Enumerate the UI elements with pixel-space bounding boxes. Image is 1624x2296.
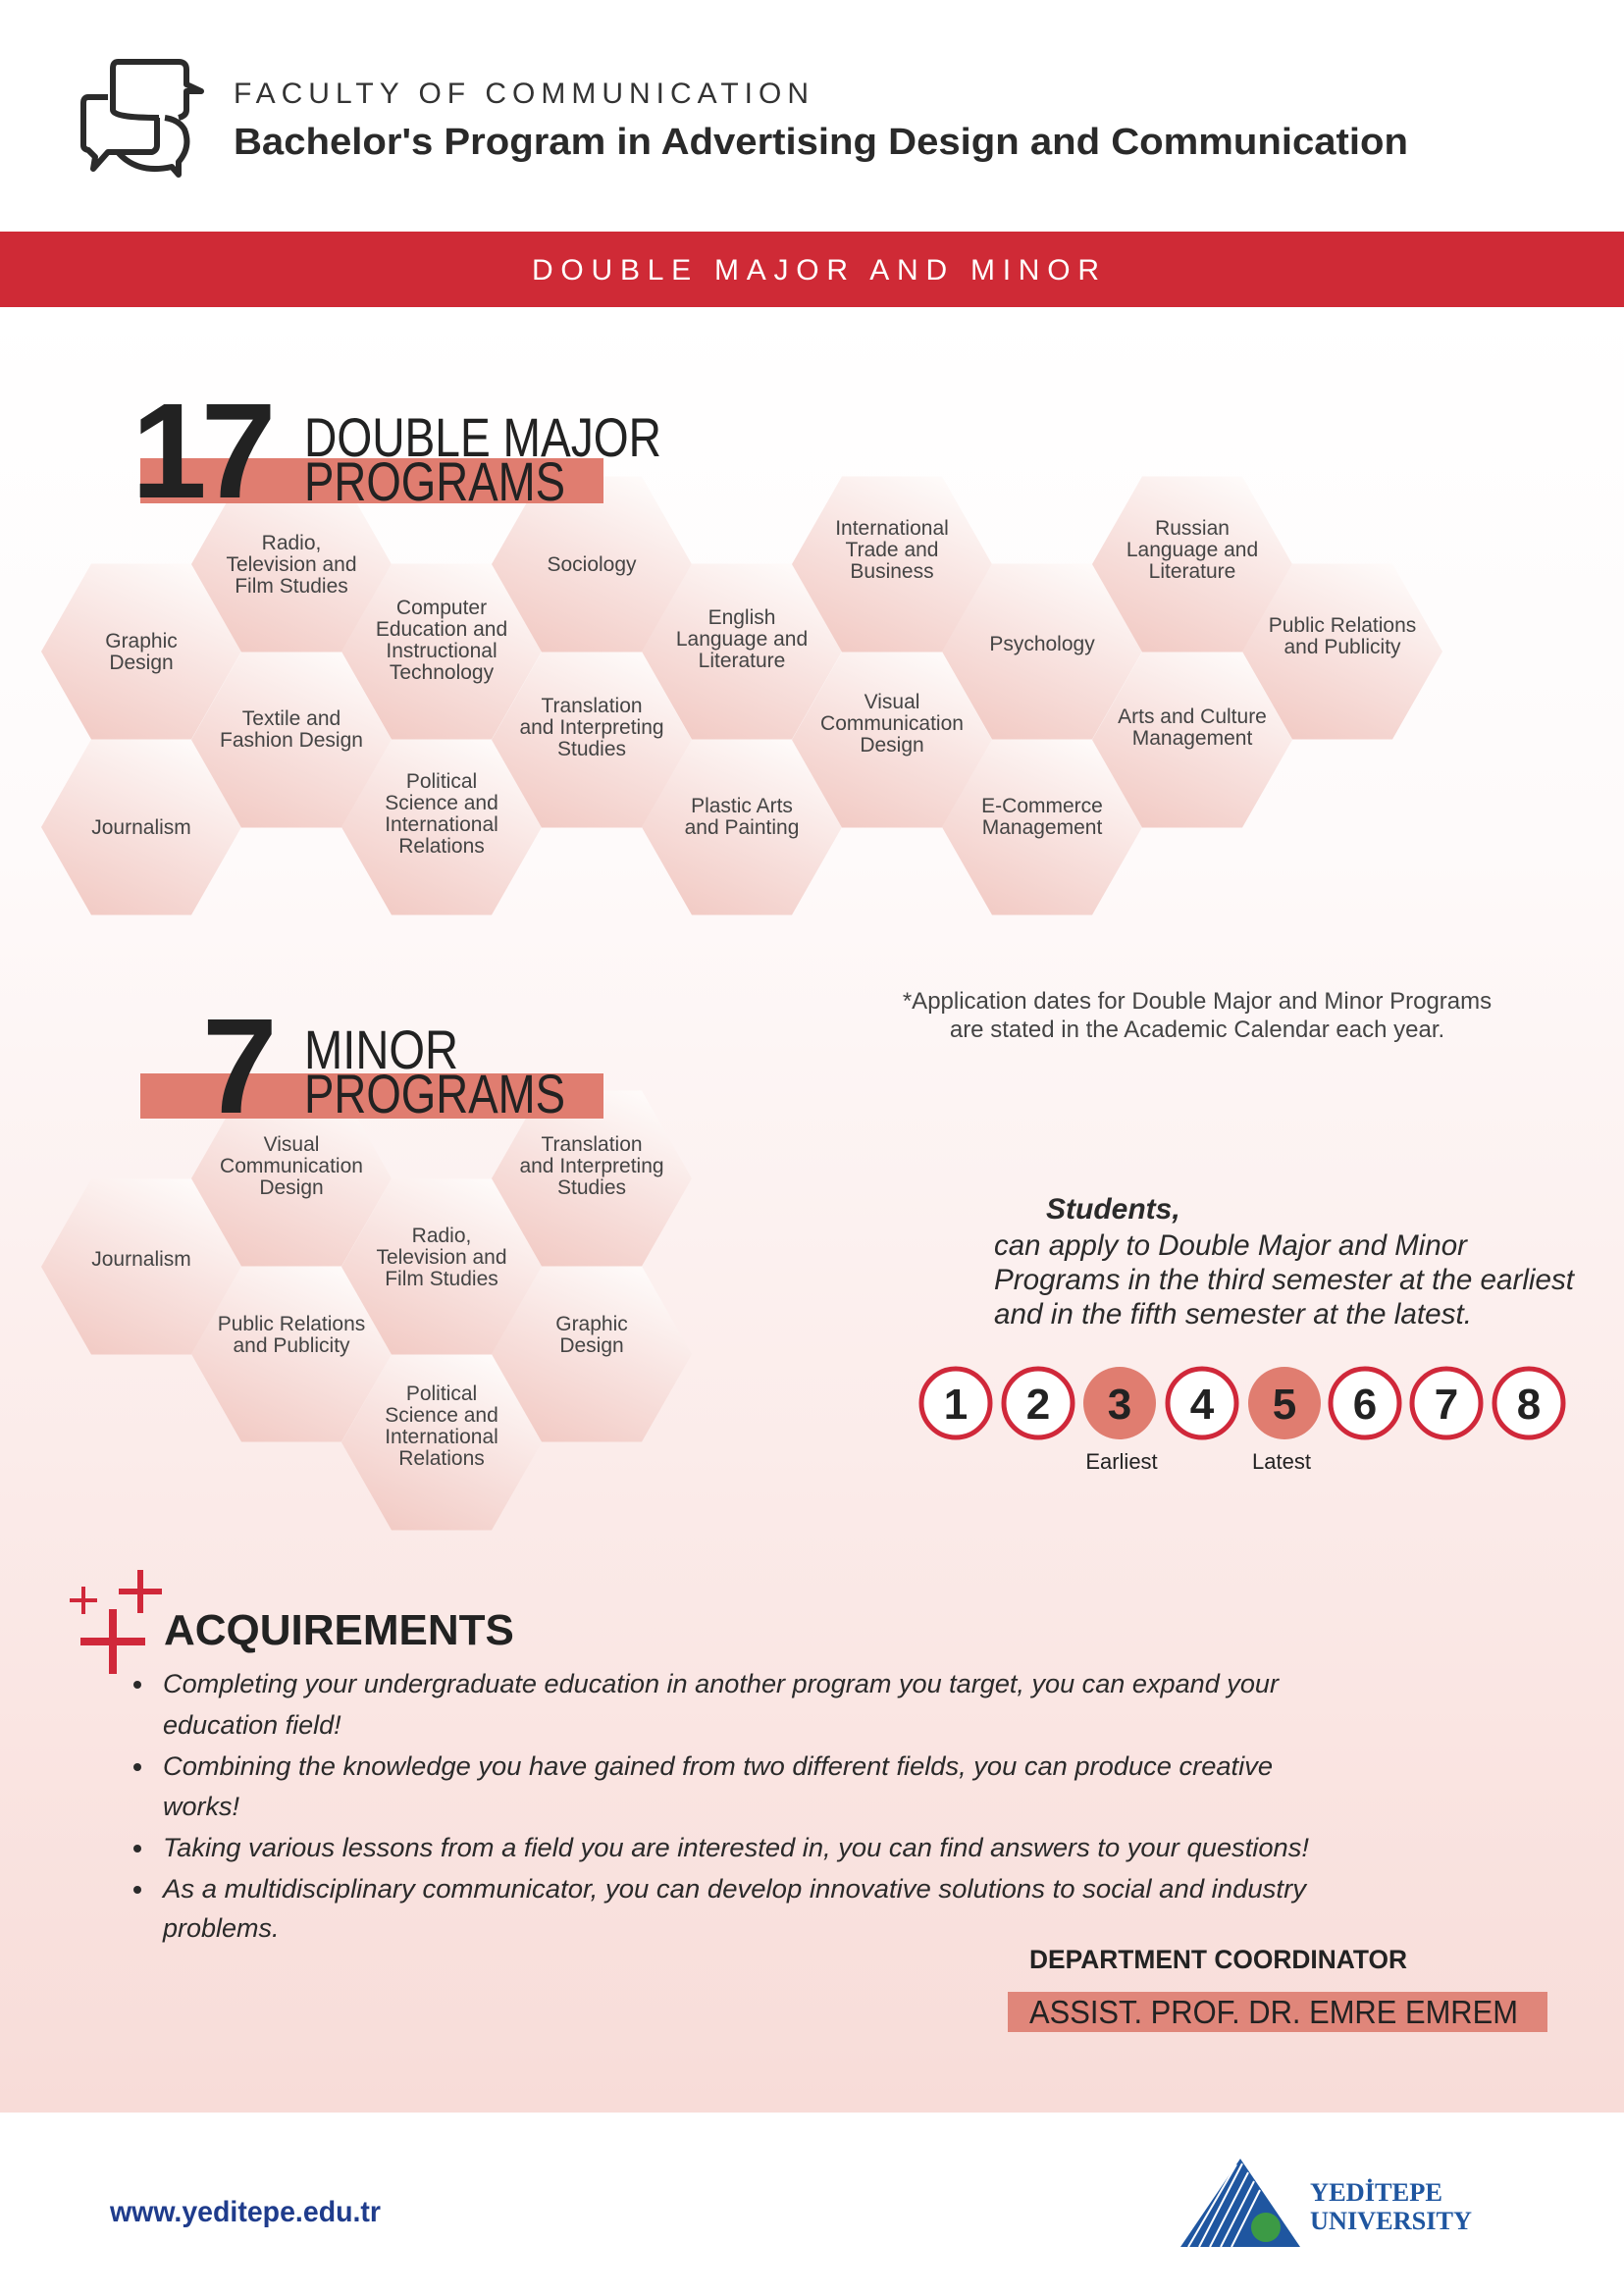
note: application dates [903,988,1492,1043]
hexagon grid: minor programs: and Interpreting [519,1155,664,1177]
header titles: Bachelor's Program in Advertising Design and Communication [234,122,1408,163]
hexagon grid: double major programs [41,477,1442,914]
hexagon grid: double major programs: Film Studies [235,575,348,598]
semester circles: 4 [1190,1381,1215,1429]
heading: 17 double major programs [131,376,661,527]
hexagon grid: double major programs: International [385,813,498,836]
hexagon grid: minor programs: Journalism [91,1248,191,1271]
hexagon grid: double major programs: Psychology [989,633,1095,655]
hexagon grid: minor programs: Relations [398,1447,485,1470]
students text block: and in the fifth semester at the latest. [994,1298,1472,1331]
hexagon grid: double major programs: Computer [396,597,487,619]
hexagon grid: minor programs: Science and [385,1404,498,1427]
students text block: Programs in the third semester at the earliest [994,1264,1576,1296]
bullet list: Taking various lessons from a field you are interested in, you can find answers to your questions! [163,1833,1309,1862]
hexagon grid: double major programs: E-Commerce [981,795,1103,817]
hexagon grid: double major programs: Design [860,734,924,757]
hexagon grid: double major programs: Language and [676,628,808,651]
hexagon grid: double major programs: Visual [864,691,919,713]
hexagon grid: double major programs: Sociology [547,553,637,576]
hexagon grid: double major programs: Studies [557,738,626,760]
semester circles: 6 [1353,1381,1377,1429]
hexagon grid: minor programs: Visual [264,1133,319,1156]
semester circles: 1 [944,1381,968,1429]
bullet list: As a multidisciplinary communicator, you can develop innovative solutions to social and industry [161,1874,1308,1904]
hexagon grid: double major programs: Instructional [386,640,498,662]
hexagon grid: double major programs: English [708,606,775,629]
hexagon grid: double major programs: Graphic [105,630,178,652]
hexagon grid: double major programs: Management [1132,727,1252,750]
hexagon grid: double major programs: International [835,517,949,540]
hexagon grid: minor programs: Television and [376,1246,507,1269]
semester circles: Earliest [1085,1449,1158,1474]
bullet list [133,1669,1309,1943]
heading: 17 double major programs: PROGRAMS [304,450,565,512]
logo: yeditepe university: UNIVERSITY [1310,2207,1472,2235]
hexagon grid: double major programs: and Publicity [1283,636,1401,658]
hexagon grid: minor programs: Translation [541,1133,643,1156]
hexagon grid: minor programs: Public Relations [218,1313,365,1335]
heading: acquirements: ACQUIREMENTS [164,1606,514,1654]
hexagon grid: double major programs: Television and [226,553,357,576]
header titles [234,78,1408,163]
icon: plus signs [70,1570,162,1674]
note: application dates: are stated in the Academic Calendar each year. [950,1017,1444,1043]
hexagon grid: double major programs: Political [406,770,477,793]
semester circles: 5 [1273,1381,1296,1429]
hexagon grid: double major programs: and Interpreting [519,716,664,739]
footer url: www.yeditepe.edu.tr [109,2196,381,2228]
hexagon grid: double major programs: Relations [398,835,485,858]
bullet list: education field! [163,1710,341,1740]
hexagon grid: minor programs: Film Studies [385,1268,498,1290]
students text block: Students, [1046,1193,1180,1226]
semester circles [921,1367,1563,1474]
hexagon grid: double major programs: Textile and [242,707,341,730]
hexagon grid: double major programs: Trade and [846,539,938,561]
hexagon grid: double major programs: Business [850,560,934,583]
hexagon grid: double major programs: Design [109,652,174,674]
hexagon grid: double major programs: Translation [541,695,643,717]
logo: yeditepe university [1180,2159,1472,2247]
hexagon grid: double major programs: Plastic Arts [691,795,793,817]
hexagon grid: minor programs [41,1091,692,1531]
heading: 17 double major programs: DOUBLE MAJOR [304,406,661,468]
hexagon grid: minor programs: Design [259,1176,324,1199]
department coordinator [1008,1945,1547,2032]
hexagon grid: double major programs: Journalism [91,816,191,839]
hexagon grid: minor programs: Design [559,1334,624,1357]
hexagon grid: double major programs: Arts and Culture [1118,705,1267,728]
hexagon grid: minor programs: Studies [557,1176,626,1199]
bullet list: Completing your undergraduate education in another program you target, you can expand your [163,1669,1280,1698]
heading: 7 minor programs: MINOR [304,1018,458,1080]
hexagon grid: minor programs: Political [406,1383,477,1405]
students text block [994,1193,1576,1331]
red band title [0,232,1624,307]
hexagon grid: double major programs: Communication [820,712,964,735]
hexagon grid: double major programs: Public Relations [1269,614,1416,637]
department coordinator: DEPARTMENT COORDINATOR [1029,1945,1407,1974]
bullet list: Combining the knowledge you have gained from two different fields, you can produce creative [163,1751,1273,1781]
footer [0,2113,1624,2296]
hexagon grid: minor programs: International [385,1426,498,1448]
heading: 7 minor programs: 7 [202,991,278,1142]
logo: yeditepe university: YEDİTEPE [1310,2178,1442,2207]
semester circles: Latest [1252,1449,1311,1474]
hexagon grid: double major programs: Management [982,816,1102,839]
department coordinator: ASSIST. PROF. DR. EMRE EMREM [1029,1994,1518,2030]
hexagon grid: double major programs: Literature [699,650,785,672]
hexagon grid: double major programs: Language and [1126,539,1258,561]
red band title: DOUBLE MAJOR AND MINOR [532,254,1099,287]
hexagon grid: double major programs: and Painting [685,816,799,839]
hexagon grid: double major programs: Technology [390,661,495,684]
hexagon grid: double major programs: Fashion Design [220,729,363,752]
hexagon grid: double major programs: Russian [1155,517,1230,540]
bullet list: works! [163,1792,240,1821]
bullet list: problems. [162,1913,280,1943]
hexagon grid: minor programs: Graphic [555,1313,628,1335]
hexagon grid: double major programs: Education and [376,618,507,641]
students text block: can apply to Double Major and Minor [994,1229,1468,1262]
heading: 7 minor programs: PROGRAMS [304,1063,565,1124]
hexagon grid: minor programs: Radio, [412,1225,471,1247]
heading: 7 minor programs [140,991,603,1142]
hexagon grid: minor programs: Communication [220,1155,363,1177]
hexagon grid: double major programs: Literature [1149,560,1235,583]
semester circles: 3 [1108,1381,1131,1429]
header titles: FACULTY OF COMMUNICATION [234,78,809,110]
note: application dates: *Application dates for Double Major and Minor Programs [903,988,1492,1015]
semester circles: 8 [1517,1381,1541,1429]
header icon: speech bubbles [83,62,201,175]
hexagon grid: double major programs: Radio, [262,532,321,554]
heading: 17 double major programs: 17 [131,376,271,527]
semester circles: 7 [1435,1381,1458,1429]
hexagon grid: double major programs: Science and [385,792,498,814]
hexagon grid: minor programs: and Publicity [233,1334,350,1357]
semester circles: 2 [1026,1381,1050,1429]
